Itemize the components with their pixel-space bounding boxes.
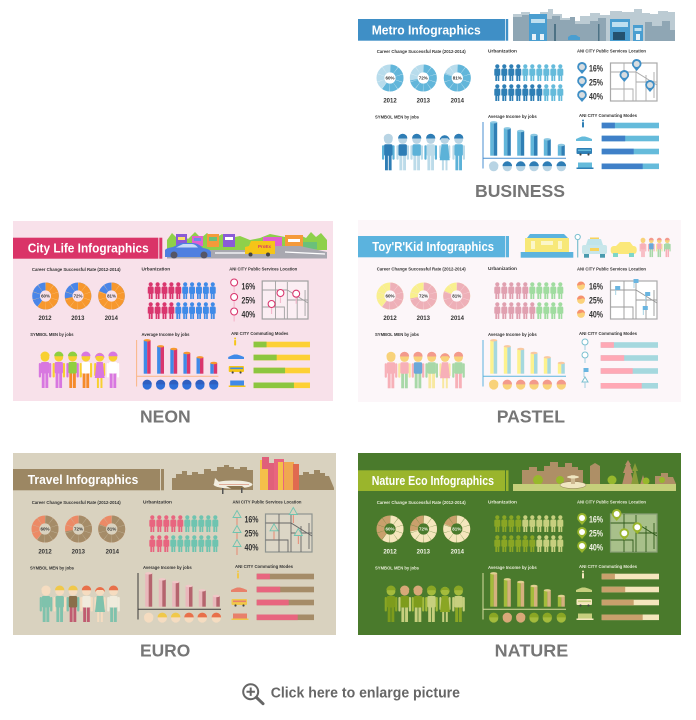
- chart: public services location: ANI CITY Public Services Location: [577, 500, 646, 505]
- chart: urbanization pictogram: Urbanization: [143, 500, 172, 504]
- chart: career change donuts: 2013: [417, 316, 431, 322]
- chart: average income by jobs: Average Income by jobs: [488, 565, 537, 570]
- chart: career change donuts: [32, 500, 121, 556]
- chart: career change donuts: Career Change Successful Rate (2012-2014): [32, 267, 121, 272]
- panel background: [358, 220, 681, 402]
- enlarge link text: Click here to enlarge picture: [271, 686, 460, 702]
- label: neon: NEON: [140, 406, 191, 426]
- chart: average income by jobs: Average Income by jobs: [488, 332, 537, 337]
- chart: average income by jobs: [137, 332, 218, 390]
- chart: public services location: 40%: [242, 308, 256, 320]
- chart: career change donuts: 2014: [451, 99, 465, 105]
- chart: career change donuts: 60%: [40, 526, 50, 532]
- chart: career change donuts: Career Change Successful Rate (2012-2014): [32, 500, 121, 505]
- chart: career change donuts: Career Change Successful Rate (2012-2014): [377, 500, 466, 505]
- figures: symbol men by jobs: [30, 332, 119, 388]
- title banner: City Life Infographics: [28, 242, 149, 256]
- chart: career change donuts: 72%: [419, 294, 428, 298]
- icon: magnifier: [243, 684, 263, 704]
- chart: urbanization pictogram: Urbanization: [488, 500, 517, 504]
- chart: career change donuts: 81%: [453, 76, 462, 80]
- figures: symbol men by jobs: SYMBOL MEN by jobs: [30, 332, 74, 337]
- chart: average income by jobs: [483, 114, 566, 171]
- illustration: skyline and plane: [172, 457, 334, 494]
- figures: symbol men by jobs: SYMBOL MEN by jobs: [375, 114, 419, 120]
- chart: career change donuts: [377, 266, 466, 322]
- chart: urbanization pictogram: [142, 266, 216, 319]
- chart: commuting modes: ANI CITY Commuting Modes: [579, 113, 637, 118]
- chart: public services location: 40%: [244, 542, 259, 554]
- chart: public services location: 25%: [589, 528, 603, 540]
- chart: career change donuts: 81%: [107, 293, 116, 299]
- title banner: [13, 469, 164, 490]
- chart: public services location: 16%: [244, 514, 259, 526]
- panel: nature: [358, 453, 681, 635]
- chart: commuting modes: [228, 331, 310, 388]
- chart: career change donuts: 72%: [74, 293, 82, 299]
- chart: career change donuts: Career Change Successful Rate (2012-2014): [377, 49, 466, 54]
- chart: career change donuts: 2012: [383, 316, 397, 322]
- chart: public services location: ANI CITY Public Services Location: [577, 266, 646, 272]
- chart: career change donuts: 2012: [383, 99, 397, 105]
- panel: pastel: [358, 220, 681, 402]
- label: pastel: PASTEL: [497, 406, 565, 426]
- panel contents: [375, 500, 659, 623]
- figures: symbol men by jobs: [375, 332, 465, 388]
- chart: career change donuts: 81%: [107, 526, 116, 532]
- figures: symbol men by jobs: [375, 114, 465, 170]
- chart: career change donuts: 60%: [385, 294, 395, 298]
- figures: symbol men by jobs: SYMBOL MEN by jobs: [375, 566, 419, 570]
- chart: urbanization pictogram: [488, 48, 563, 101]
- chart: commuting modes: ANI CITY Commuting Modes: [579, 564, 637, 569]
- title banner: Metro Infographics: [372, 23, 481, 37]
- panel contents: [30, 500, 314, 623]
- panel background: [358, 453, 681, 635]
- chart: public services location: 40%: [589, 310, 603, 320]
- chart: commuting modes: ANI CITY Commuting Modes: [579, 331, 637, 336]
- chart: urbanization pictogram: Urbanization: [488, 266, 517, 271]
- title banner: Toy'R'Kid Infographics: [372, 240, 494, 254]
- panel: business: [358, 9, 675, 171]
- chart: career change donuts: [32, 267, 121, 322]
- chart: public services location: 25%: [244, 528, 259, 540]
- figures: symbol men by jobs: [30, 566, 120, 622]
- chart: commuting modes: ANI CITY Commuting Modes: [231, 331, 289, 336]
- chart: career change donuts: 2014: [451, 316, 465, 322]
- illustration: tram, cars and kids: [521, 234, 671, 258]
- chart: career change donuts: 2014: [106, 550, 120, 556]
- chart: commuting modes: [576, 564, 659, 620]
- chart: career change donuts: 60%: [385, 526, 395, 532]
- chart: career change donuts: Career Change Successful Rate (2012-2014): [377, 266, 466, 272]
- illustration: street with car and van: ProEx: [258, 244, 272, 249]
- chart: commuting modes: [231, 564, 314, 620]
- chart: career change donuts: 2014: [451, 550, 465, 556]
- label: euro: EURO: [140, 641, 191, 661]
- panel: euro: [13, 453, 336, 635]
- chart: career change donuts: 2013: [71, 316, 85, 322]
- chart: urbanization pictogram: [143, 500, 218, 552]
- chart: career change donuts: 2013: [417, 99, 431, 105]
- title banner: [358, 236, 509, 257]
- chart: public services location: 25%: [589, 296, 603, 306]
- chart: public services location: 40%: [589, 92, 603, 102]
- title banner: Travel Infographics: [28, 473, 138, 487]
- chart: career change donuts: 2013: [417, 550, 431, 556]
- chart: career change donuts: [377, 500, 466, 556]
- chart: career change donuts: 81%: [452, 526, 461, 532]
- chart: average income by jobs: [138, 565, 221, 623]
- chart: career change donuts: 72%: [419, 526, 428, 532]
- chart: public services location: [577, 266, 657, 320]
- panel contents: [30, 266, 310, 390]
- panel background: [13, 221, 333, 401]
- chart: career change donuts: 2012: [38, 550, 52, 556]
- chart: career change donuts: 72%: [419, 76, 428, 80]
- figures: symbol men by jobs: SYMBOL MEN by jobs: [375, 332, 419, 337]
- chart: career change donuts: 2013: [72, 550, 86, 556]
- illustration: street with car and van: [165, 232, 327, 258]
- panel contents: [375, 48, 659, 171]
- chart: public services location: [229, 267, 308, 322]
- chart: urbanization pictogram: Urbanization: [142, 266, 170, 272]
- chart: commuting modes: ANI CITY Commuting Modes: [235, 564, 293, 569]
- chart: average income by jobs: Average Income by jobs: [142, 332, 190, 337]
- chart: career change donuts: 81%: [452, 294, 461, 298]
- figures: symbol men by jobs: SYMBOL MEN by jobs: [30, 566, 74, 570]
- label: nature: NATURE: [495, 641, 568, 661]
- chart: commuting modes: [576, 113, 659, 169]
- chart: public services location: 25%: [589, 78, 603, 88]
- chart: public services location: ANI CITY Public Services Location: [577, 49, 646, 54]
- chart: public services location: 16%: [242, 280, 256, 292]
- panel contents: [375, 266, 658, 390]
- chart: public services location: 16%: [589, 282, 603, 292]
- chart: urbanization pictogram: [488, 500, 563, 552]
- chart: public services location: ANI CITY Public Services Location: [232, 500, 302, 505]
- chart: career change donuts: 2012: [38, 316, 52, 322]
- chart: public services location: [577, 49, 657, 102]
- panel background: [13, 453, 336, 635]
- chart: career change donuts: 60%: [41, 293, 50, 299]
- chart: career change donuts: 2012: [383, 550, 397, 556]
- figures: symbol men by jobs: [375, 566, 465, 622]
- illustration: city skyline: [513, 9, 675, 41]
- chart: public services location: 16%: [589, 514, 603, 526]
- chart: career change donuts: 72%: [74, 526, 83, 532]
- chart: public services location: [232, 500, 312, 555]
- chart: average income by jobs: Average Income by jobs: [143, 565, 192, 570]
- chart: commuting modes: [579, 331, 658, 389]
- chart: public services location: 25%: [242, 294, 256, 306]
- chart: career change donuts: [377, 49, 467, 105]
- panel: neon: [13, 221, 333, 401]
- label: business: BUSINESS: [475, 181, 565, 201]
- chart: public services location: [577, 500, 657, 554]
- title banner: [358, 19, 508, 41]
- chart: public services location: ANI CITY Public Services Location: [229, 267, 297, 272]
- illustration: park with fountain: [513, 460, 676, 491]
- title banner: [358, 470, 508, 491]
- title banner: [13, 238, 162, 259]
- chart: urbanization pictogram: [488, 266, 563, 319]
- chart: career change donuts: 60%: [385, 76, 395, 80]
- chart: public services location: 40%: [589, 542, 603, 554]
- chart: career change donuts: 2014: [105, 316, 119, 322]
- chart: urbanization pictogram: Urbanization: [488, 48, 517, 54]
- title banner: Nature Eco Infographics: [372, 474, 494, 488]
- chart: average income by jobs: [483, 332, 566, 390]
- chart: average income by jobs: [483, 565, 566, 623]
- chart: public services location: 16%: [589, 64, 603, 74]
- chart: average income by jobs: Average Income by jobs: [488, 114, 537, 119]
